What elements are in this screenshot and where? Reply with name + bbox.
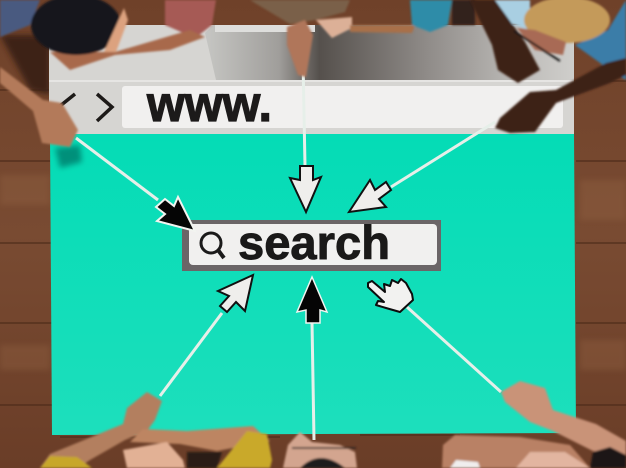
person: top right [470,0,626,133]
browser panel: address band [49,25,574,134]
www text: www. [146,76,272,132]
panel: teal board [50,134,576,435]
arrow: white lower-left cursor [218,275,253,312]
arrow: white top-right cursor [349,180,391,212]
person: top centre [250,0,475,77]
person: bottom right [442,381,626,468]
person: bottom left [40,392,272,468]
arrow: black up cursor [297,277,327,323]
person: top left [0,0,216,147]
icon: forward chevron [97,94,112,121]
icon: pixel hand cursor [368,279,413,312]
hand shadow on board [55,145,82,168]
icon: magnifier [201,233,224,258]
search box [182,216,441,271]
arrow: white down cursor [290,166,321,212]
pointer sticks [76,60,501,440]
address field [122,76,563,132]
search word: search [238,216,390,269]
person: bottom centre [283,432,357,468]
arrow: black top-left cursor [156,197,195,231]
